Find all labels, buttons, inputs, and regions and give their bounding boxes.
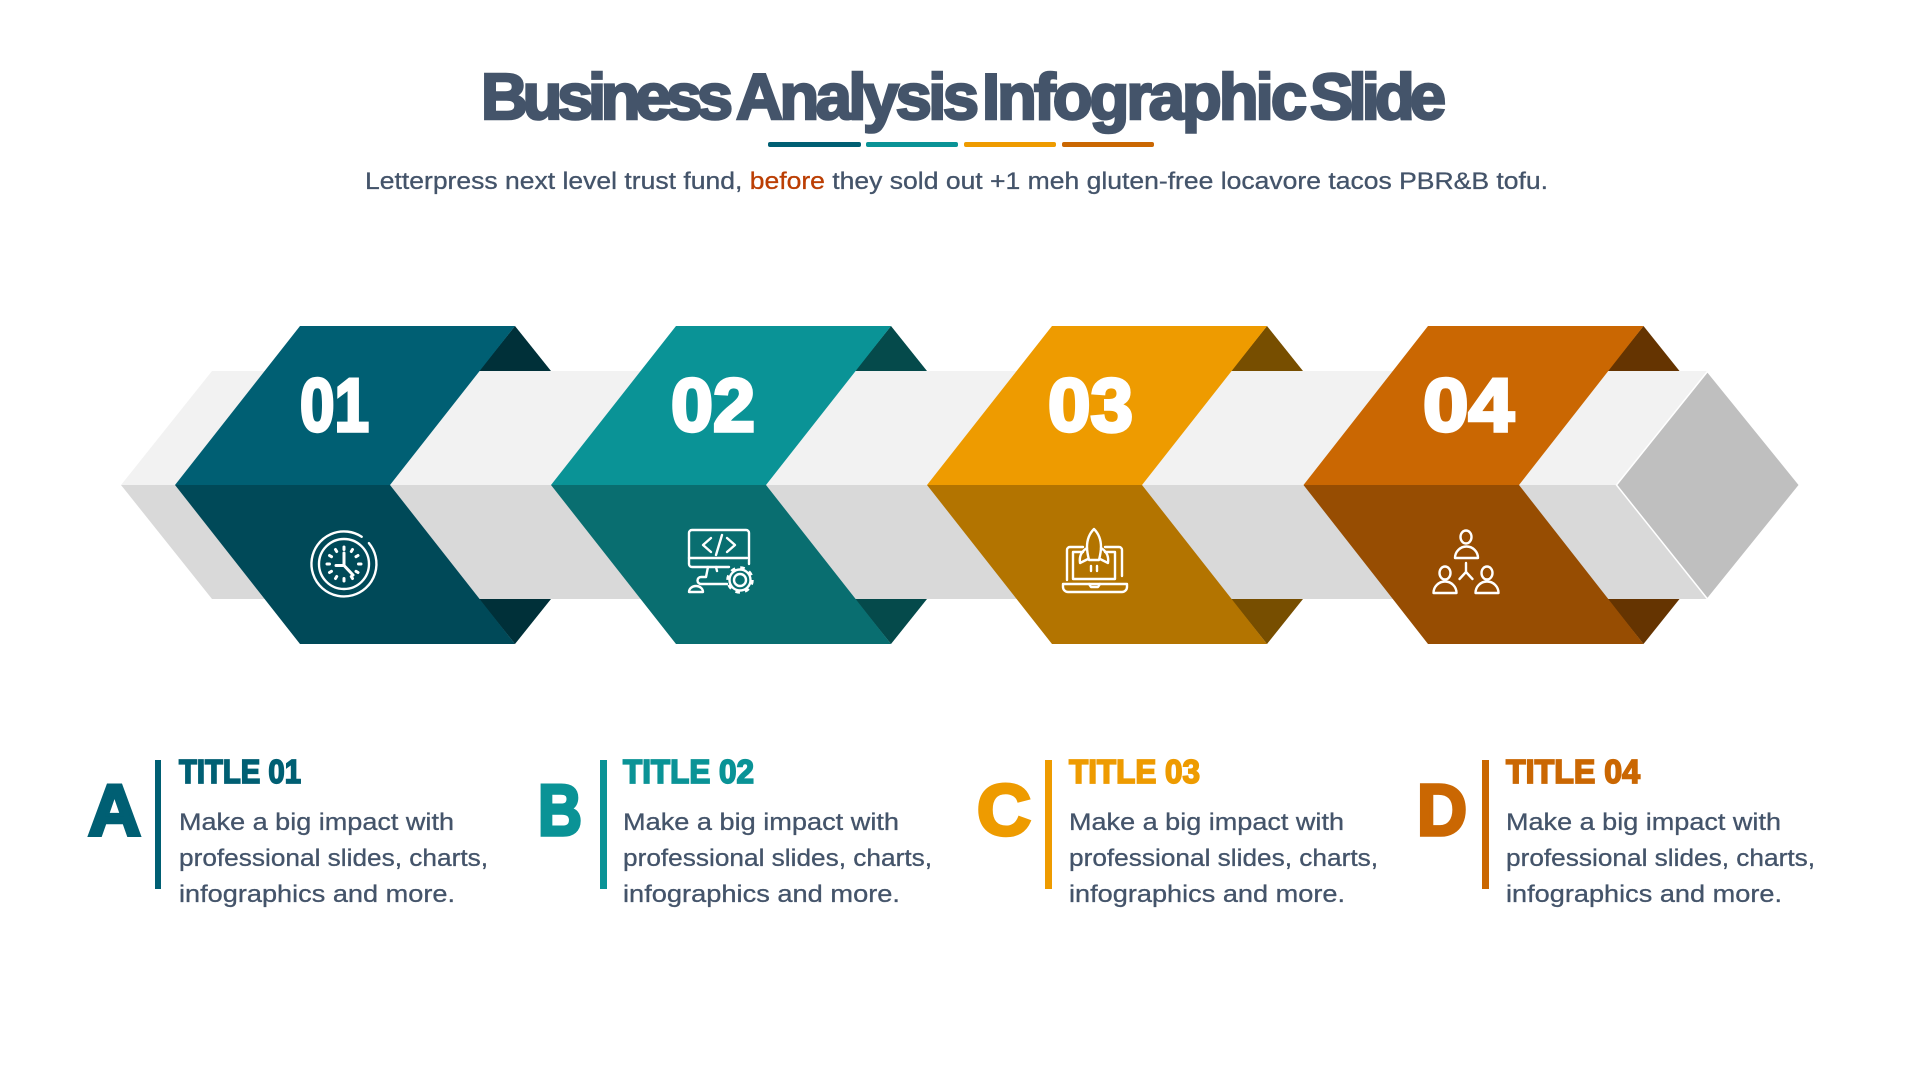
letter A: A — [88, 771, 141, 851]
chevron 01 — [175, 326, 551, 644]
block D — [1417, 753, 1641, 889]
letter C: C — [977, 771, 1031, 851]
text B — [623, 809, 932, 908]
icon: rocket over laptop — [1063, 529, 1127, 592]
text C: Make a big impact with — [1069, 809, 1344, 836]
title: Slide — [1310, 60, 1446, 133]
chevron 03 — [927, 326, 1303, 644]
number 01: 01 — [300, 363, 369, 447]
text A: Make a big impact with — [179, 809, 454, 836]
text D: Make a big impact with — [1506, 809, 1781, 836]
icon: monitor with code and gear — [689, 530, 752, 592]
text B: Make a big impact with — [623, 809, 899, 836]
number 02: 02 — [671, 363, 755, 447]
heading 03: TITLE 03 — [1069, 753, 1200, 790]
subtitle: Letterpress next level trust fund, before they sold out +1 meh gluten-free locavore tacos PBR&B tofu. — [365, 168, 1548, 195]
icon: clock — [311, 531, 376, 596]
text C — [1069, 809, 1378, 908]
text D — [1506, 809, 1815, 908]
block A — [88, 753, 301, 889]
heading 02: TITLE 02 — [623, 753, 754, 790]
title — [481, 60, 1446, 133]
divider D — [1482, 760, 1489, 889]
title: Infographic — [982, 60, 1307, 133]
chevron 02 — [551, 326, 927, 644]
text D: infographics and more. — [1506, 881, 1782, 908]
number 04: 04 — [1423, 363, 1514, 447]
text B: professional slides, charts, — [623, 845, 932, 872]
text B: infographics and more. — [623, 881, 900, 908]
title: Analysis — [736, 60, 979, 133]
block B — [538, 753, 754, 889]
number 03: 03 — [1048, 363, 1133, 447]
text A — [179, 809, 488, 908]
heading 01: TITLE 01 — [179, 753, 301, 790]
text A: infographics and more. — [179, 881, 455, 908]
text C: infographics and more. — [1069, 881, 1345, 908]
divider B — [600, 760, 607, 889]
title underline bars — [768, 142, 1154, 147]
divider C — [1045, 760, 1052, 889]
title: Business — [481, 60, 733, 133]
text C: professional slides, charts, — [1069, 845, 1378, 872]
block C — [977, 753, 1200, 889]
icon: people network — [1434, 530, 1498, 593]
letter D: D — [1417, 771, 1467, 851]
heading 04: TITLE 04 — [1506, 753, 1641, 790]
text A: professional slides, charts, — [179, 845, 488, 872]
chevron 04 — [1304, 326, 1680, 644]
divider A — [155, 760, 161, 889]
letter B: B — [538, 771, 582, 851]
3D grey bar — [121, 371, 1800, 599]
text D: professional slides, charts, — [1506, 845, 1815, 872]
